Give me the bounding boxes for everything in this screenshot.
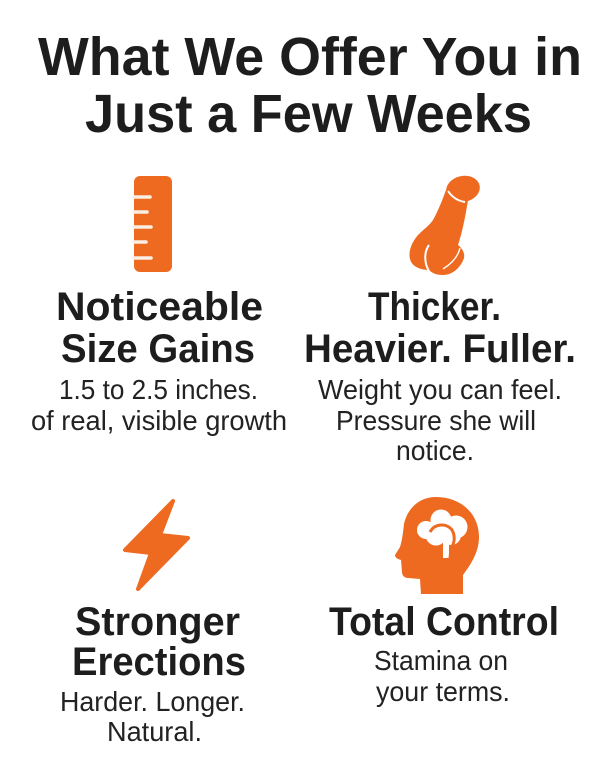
heading: thicker heavier fuller: Heavier. Fuller. [304,327,576,371]
text: harder longer natural [60,686,245,747]
text: stamina on your terms: Stamina on [374,645,508,676]
icon: head with brain [395,497,479,594]
heading: noticeable size gains [56,285,263,371]
text: harder longer natural: Harder. Longer. [60,686,245,717]
panel: total control [329,497,559,707]
text: stamina on your terms [374,645,510,707]
text: harder longer natural: Natural. [107,716,202,747]
heading: noticeable size gains: Noticeable [56,285,263,329]
heading: stronger erections [72,600,246,684]
heading: noticeable size gains: Size Gains [61,327,255,371]
icon: lightning bolt [125,501,188,589]
text: size gains description: 1.5 to 2.5 inches. [59,374,258,405]
heading: stronger erections: Erections [72,640,246,684]
heading: total control: Total Control [329,600,559,644]
icon: anatomical silhouette [409,173,482,275]
text: size gains description [31,374,287,436]
title: Just a Few Weeks [85,84,532,144]
text: stamina on your terms: your terms. [376,676,510,707]
title: What We Offer You in [38,27,582,87]
text: weight description: notice. [396,435,474,466]
heading: stronger erections: Stronger [75,600,240,644]
text: weight description [318,374,562,466]
text: weight description: Pressure she will [336,405,536,436]
heading: thicker heavier fuller: Thicker. [368,285,501,329]
title [38,27,582,144]
panel: stronger erections [60,501,246,747]
heading: thicker heavier fuller [304,285,576,371]
icon: ruler [134,176,172,272]
text: weight description: Weight you can feel. [318,374,562,405]
panel: noticeable size gains [31,176,287,436]
panel: thicker heavier fuller [304,173,576,466]
text: size gains description: of real, visible growth [31,405,287,436]
